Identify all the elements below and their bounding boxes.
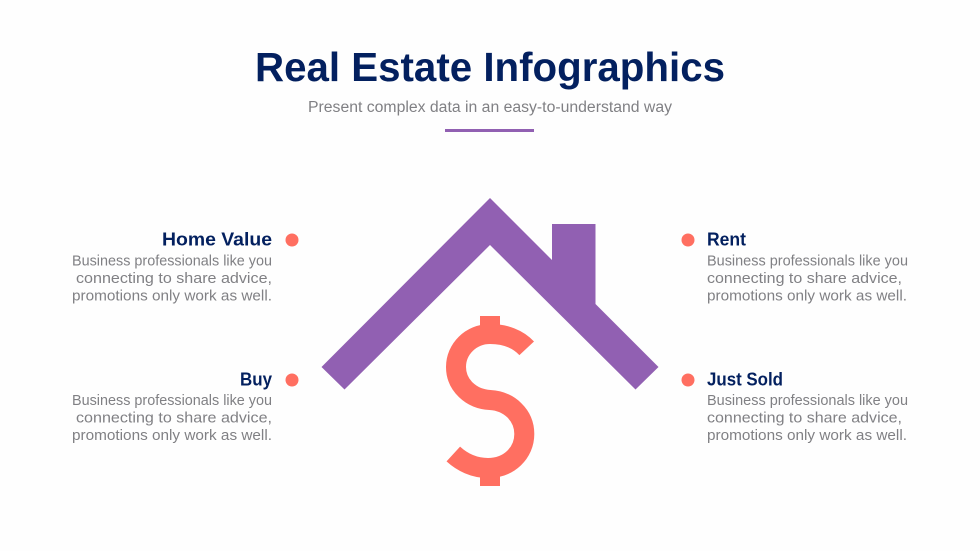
text: Home Value description	[72, 252, 272, 304]
title underline	[445, 129, 534, 132]
icon: dollar sign	[453, 316, 527, 486]
item: Home Value	[72, 230, 298, 304]
text: Rent description	[707, 252, 908, 304]
marker dot: Home Value	[286, 234, 298, 246]
text: Home Value description: promotions only work as well.	[72, 288, 272, 304]
item: Just Sold	[682, 370, 908, 444]
text: Just Sold description: promotions only work as well.	[707, 427, 907, 444]
text: Buy description: connecting to share advice,	[76, 410, 272, 426]
text: Rent description: Business professionals like you	[707, 252, 908, 270]
text: Home Value description: connecting to share advice,	[76, 270, 272, 287]
text: Rent description: connecting to share advice,	[707, 270, 902, 287]
item: Rent	[682, 230, 908, 304]
text: Buy description: Business professionals like you	[72, 392, 272, 409]
icon: house roof with chimney	[322, 198, 658, 390]
marker dot: Buy	[286, 374, 298, 386]
text: Just Sold description	[707, 392, 908, 444]
title: Real Estate Infographics	[255, 44, 725, 90]
text: Buy description: promotions only work as well.	[72, 427, 272, 444]
heading: Rent: Rent	[707, 230, 746, 250]
text: Rent description: promotions only work as well.	[707, 288, 907, 304]
heading: Home Value: Home Value	[162, 230, 272, 250]
marker dot: Rent	[682, 234, 694, 246]
item: Buy	[72, 370, 298, 444]
text: Buy description	[72, 392, 272, 444]
marker dot: Just Sold	[682, 374, 694, 386]
subtitle: Present complex data in an easy-to-understand way	[308, 99, 672, 116]
text: Just Sold description: Business professionals like you	[707, 392, 908, 409]
text: Home Value description: Business professionals like you	[72, 252, 272, 270]
heading: Just Sold: Just Sold	[707, 370, 783, 390]
heading: Buy: Buy	[240, 370, 272, 390]
text: Just Sold description: connecting to share advice,	[707, 410, 902, 426]
